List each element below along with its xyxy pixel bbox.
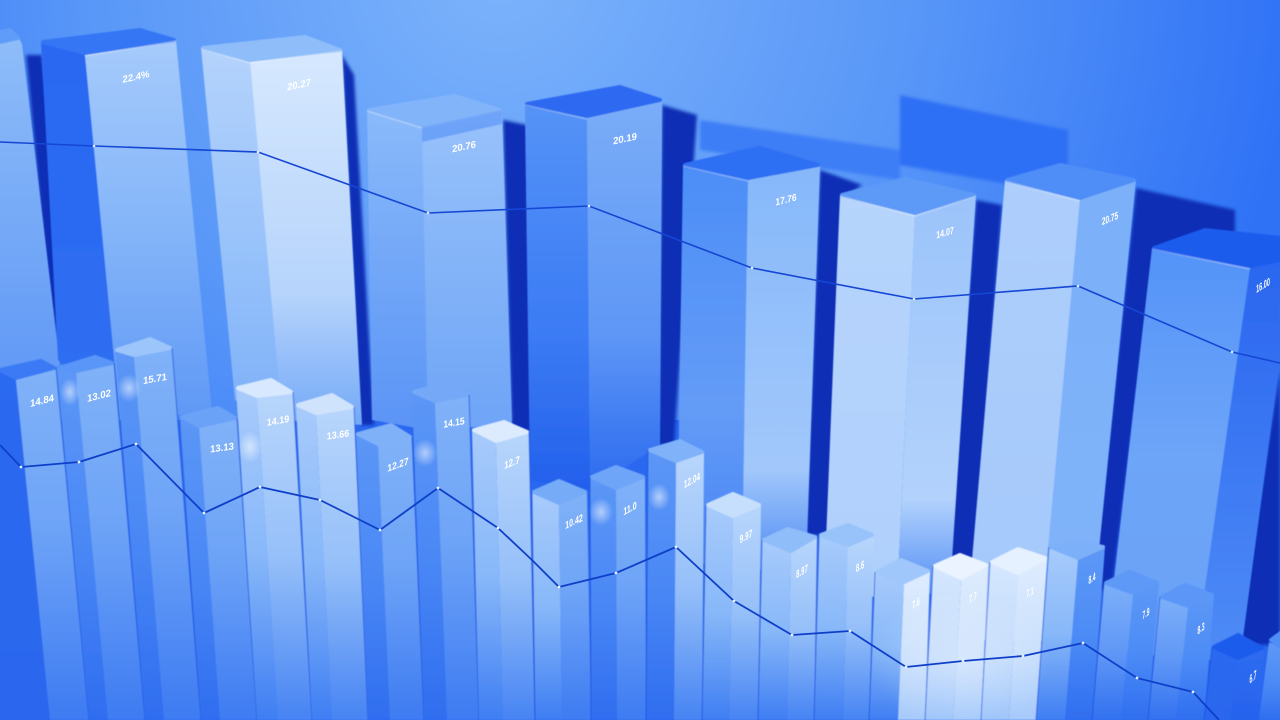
front trend line: [0, 443, 1219, 720]
glass reflections: [60, 374, 1050, 720]
back bar 3: [201, 37, 362, 425]
front row value labels: 12.7: [504, 454, 520, 472]
back row value labels: [123, 69, 1270, 295]
front row value labels: 14.19: [267, 414, 289, 429]
front row value labels: 12.27: [387, 456, 409, 475]
front row value labels: 11.0: [623, 499, 637, 518]
front row value labels: 12.04: [684, 470, 701, 491]
front row value labels: 7.6: [912, 595, 920, 612]
back bar 9: [1106, 230, 1280, 660]
front row value labels: 13.66: [327, 428, 349, 443]
back bar 7: [824, 179, 976, 600]
front row value labels: 13.02: [87, 388, 111, 405]
front row value labels: 6.7: [1250, 667, 1256, 687]
front row value labels: 15.71: [143, 372, 167, 387]
back bar 6: [677, 148, 820, 570]
front row value labels: 8.3: [1198, 619, 1204, 637]
front row value labels: 7.1: [1027, 584, 1034, 601]
front row value labels: 8.6: [856, 558, 864, 575]
back row value labels: 14.07: [936, 224, 954, 241]
front row value labels: 8.4: [1089, 570, 1096, 587]
front bar 19: [1036, 542, 1105, 720]
front bar 6: [296, 395, 368, 720]
front row value labels: [30, 372, 1256, 687]
back row value labels: 20.19: [613, 131, 637, 148]
front bar 14: [758, 529, 817, 720]
front row value labels: 10.42: [565, 512, 583, 531]
back row value labels: 20.76: [452, 139, 476, 156]
front bar 8: [412, 384, 479, 720]
front bar 20: [1092, 572, 1159, 720]
front bar 10: [532, 481, 591, 720]
back trend line: [0, 142, 1280, 363]
front bar 22: [1204, 635, 1264, 720]
back bar 8: [965, 165, 1136, 640]
back bar 5: [525, 87, 662, 490]
front row value labels: 14.84: [30, 393, 54, 410]
front bar 17: [925, 555, 988, 720]
front bar 4: [180, 408, 257, 720]
front row value labels: 14.15: [443, 416, 465, 430]
front row value labels: 13.13: [210, 441, 234, 456]
front bar 3: [115, 339, 201, 720]
front bar 23: [1259, 632, 1280, 720]
back bar 4: [367, 96, 512, 430]
floor: [0, 420, 1280, 720]
back row value labels: 16.00: [1256, 275, 1270, 295]
front bar 13: [702, 494, 761, 720]
front row value labels: 7.7: [969, 589, 977, 606]
back row value labels: 22.4%: [123, 69, 150, 86]
front bar 16: [869, 560, 930, 720]
front bar 5: [236, 380, 312, 720]
front bar 21: [1148, 585, 1214, 720]
front row value labels: 8.97: [796, 562, 808, 581]
front row value labels: 7.9: [1143, 605, 1149, 622]
front bar 7: [356, 425, 424, 720]
front bar 11: [590, 467, 646, 720]
front bar 15: [814, 525, 874, 720]
front bar 18: [981, 549, 1047, 720]
front bar 9: [472, 422, 535, 720]
front bar 12: [646, 441, 704, 720]
back bar 2: [41, 30, 212, 420]
back row value labels: 20.75: [1102, 209, 1118, 228]
front bar 1: [0, 361, 89, 720]
back row value labels: 17.76: [775, 191, 797, 208]
front bar 2: [57, 357, 145, 720]
back bar 1: [0, 30, 60, 400]
back row value labels: 20.27: [287, 77, 311, 94]
front row value labels: 9.97: [740, 527, 752, 546]
front row bars: [0, 339, 1280, 720]
